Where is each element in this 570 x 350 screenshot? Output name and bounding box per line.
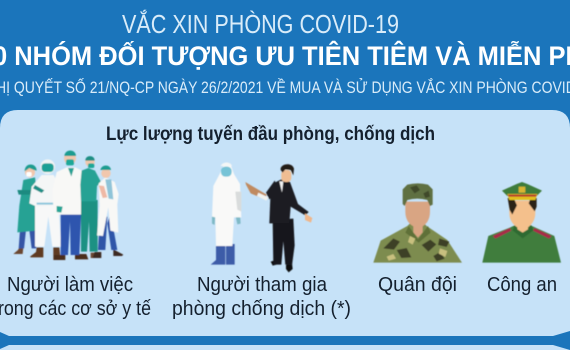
panel heading: Lực lượng tuyến đầu phòng, chống dịch — [106, 124, 435, 145]
title: vaccine: VẮC XIN PHÒNG COVID-19 — [122, 9, 399, 39]
clipboard and arm — [245, 181, 279, 201]
worker in white coat, right — [93, 165, 123, 258]
worker in teal scrubs — [80, 156, 101, 258]
icon: official and suited man — [211, 162, 312, 272]
label: epidemic participants — [172, 274, 351, 320]
icon: police officer — [482, 182, 561, 263]
suited man — [269, 164, 312, 272]
panel: frontline forces — [0, 110, 570, 350]
label: army: Quân đội — [378, 274, 457, 296]
worker in white coat, central — [53, 150, 88, 260]
label: epidemic participants: Người tham gia — [197, 274, 328, 296]
icon: soldier — [373, 183, 462, 263]
worker in teal gown — [13, 164, 38, 254]
label: health workers: Người làm việc — [7, 274, 133, 296]
protective suit figure — [211, 162, 241, 265]
label: health workers — [0, 274, 151, 320]
icon: medical workers — [13, 150, 123, 260]
worker in protective suit — [29, 159, 62, 260]
label: epidemic participants: phòng chống dịch (*) — [172, 298, 351, 320]
label: police: Công an — [487, 274, 557, 296]
